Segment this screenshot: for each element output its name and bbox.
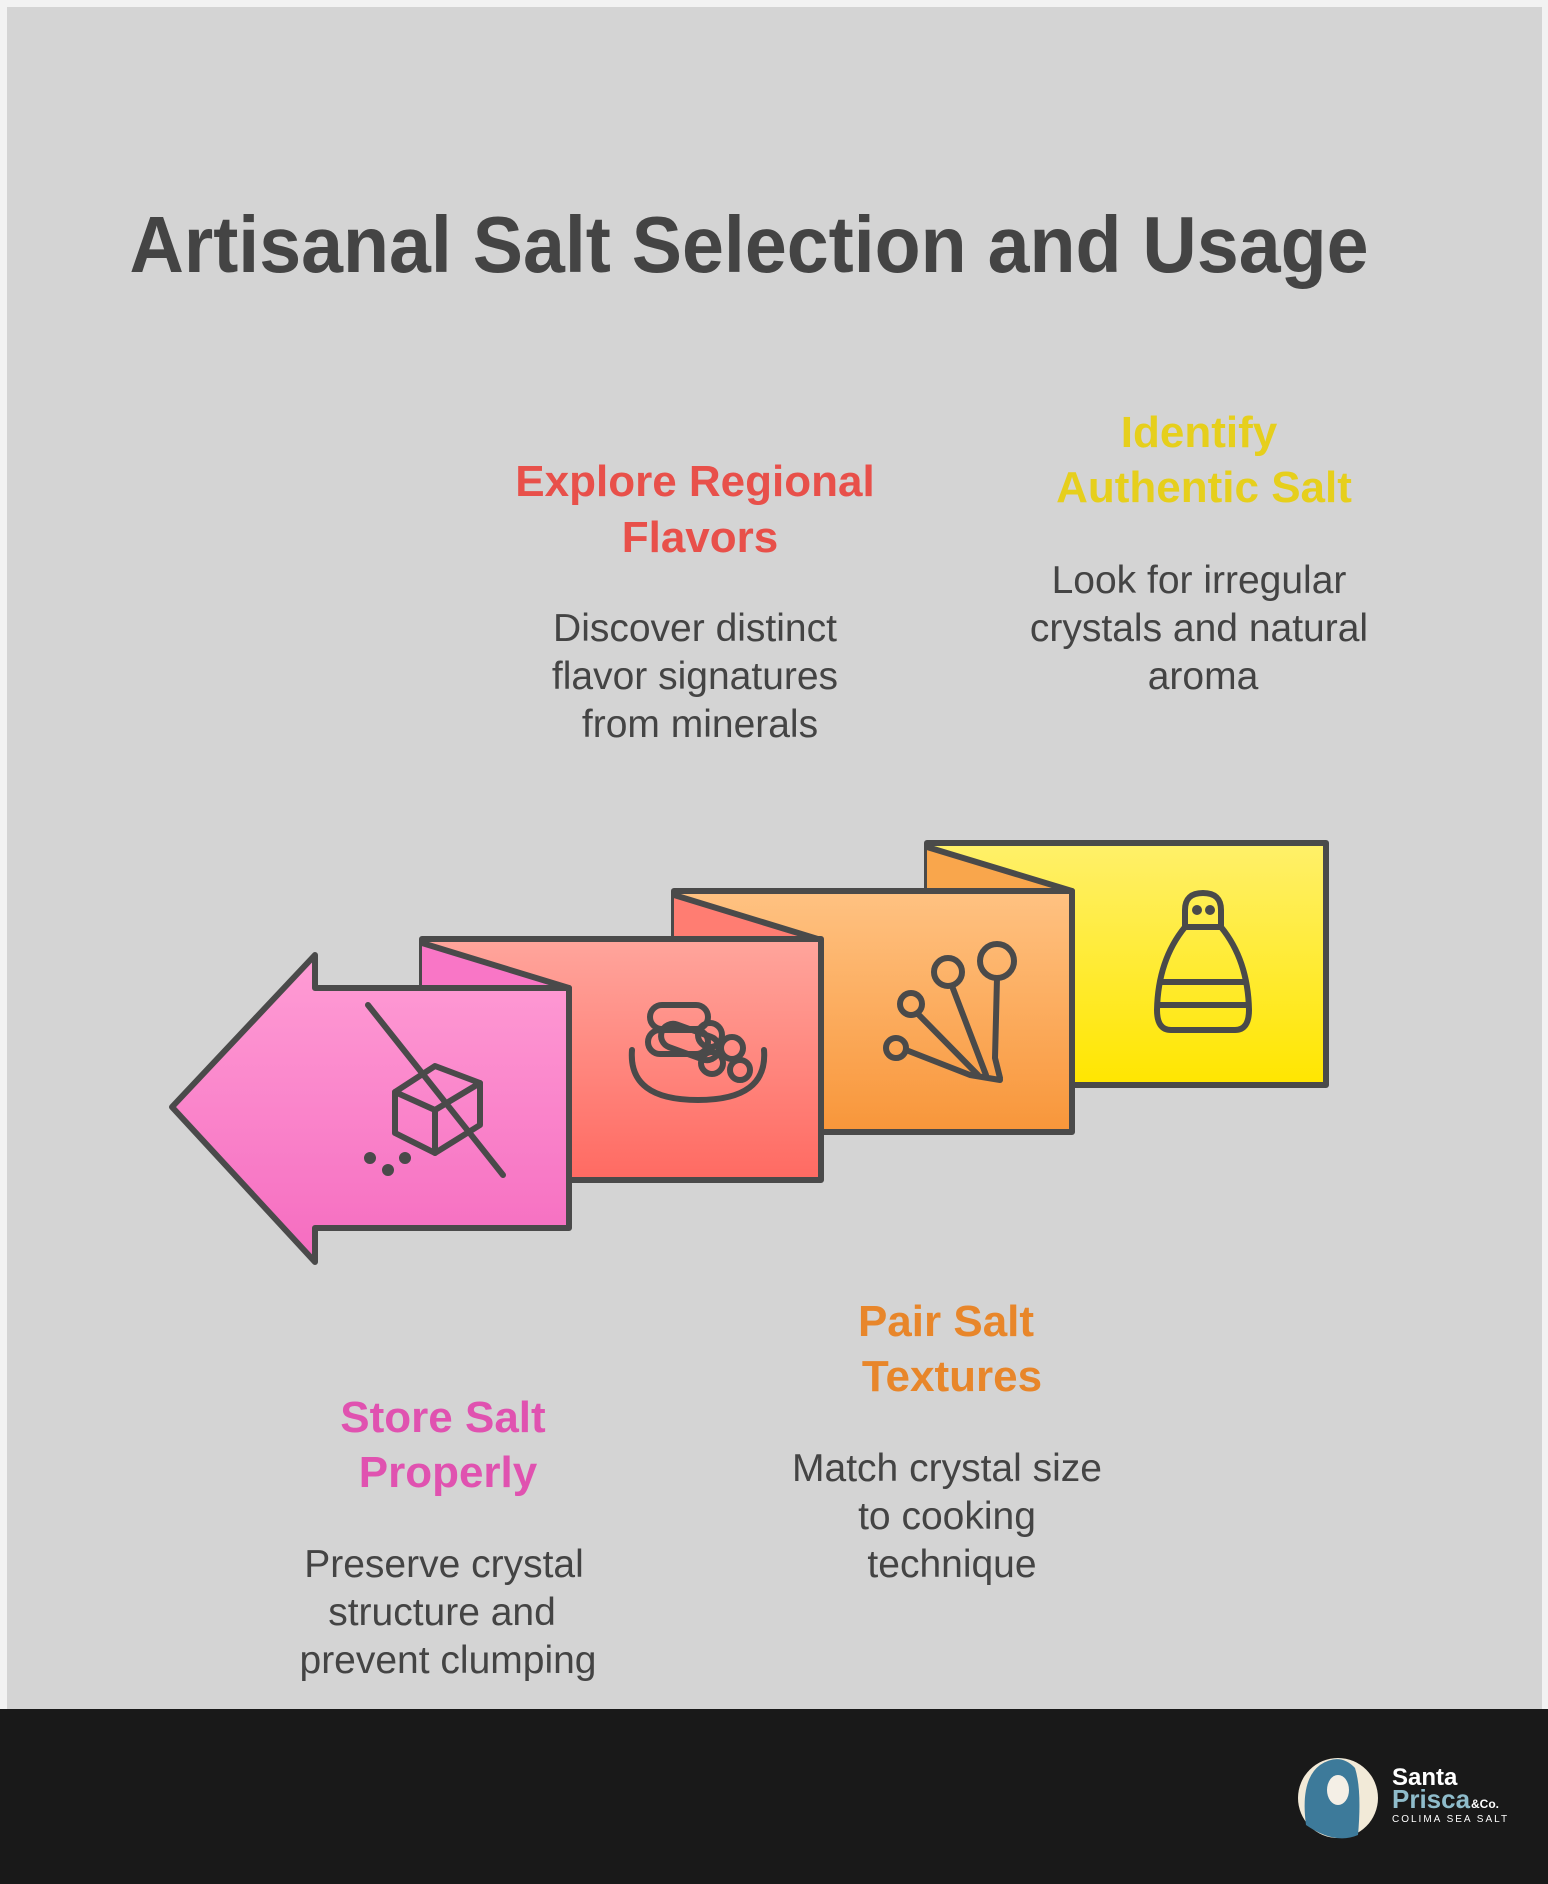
heading: identify authentic salt: Authentic Salt	[1056, 463, 1352, 512]
card: orange	[674, 891, 1072, 1132]
logo: Santa Prisca & Co.: COLIMA SEA SALT	[1392, 1814, 1509, 1825]
icon: salt logs on plate	[632, 1005, 764, 1100]
text: pair description: to cooking	[858, 1495, 1036, 1538]
heading: pair salt textures: Textures	[862, 1352, 1042, 1401]
text: identify description: aroma	[1148, 655, 1259, 698]
heading: store salt properly	[340, 1393, 546, 1497]
heading: store salt properly: Store Salt	[340, 1393, 546, 1442]
logo: Santa Prisca & Co.: Santa	[1392, 1764, 1458, 1791]
text: explore description: flavor signatures	[552, 655, 838, 698]
heading: pair salt textures: Pair Salt	[858, 1297, 1034, 1346]
heading: explore regional flavors: Explore Regional	[515, 457, 875, 506]
icon: salt shaker	[1157, 893, 1249, 1030]
heading: identify authentic salt: Identify	[1121, 408, 1278, 457]
text: pair description: Match crystal size	[792, 1447, 1102, 1490]
text: explore description: Discover distinct	[553, 607, 837, 650]
heading: identify authentic salt	[1056, 408, 1352, 512]
text: store description: prevent clumping	[300, 1639, 596, 1682]
card: yellow	[927, 843, 1326, 1085]
icon: measuring spoons	[886, 944, 1014, 1080]
logo: Santa Prisca & Co.: &Co.	[1471, 1797, 1499, 1811]
text: explore description	[552, 607, 838, 746]
title: Artisanal Salt Selection and Usage	[130, 200, 1368, 289]
arrow: pink	[172, 955, 569, 1262]
heading: pair salt textures	[858, 1297, 1042, 1401]
heading: explore regional flavors	[515, 457, 875, 562]
text: pair description	[792, 1447, 1102, 1586]
icon: no cube salt	[367, 1005, 503, 1175]
text: store description: structure and	[328, 1591, 556, 1634]
footer	[0, 1709, 1548, 1884]
logo: Santa Prisca & Co.: Prisca	[1392, 1784, 1471, 1814]
text: store description	[300, 1543, 596, 1682]
card: red	[422, 939, 821, 1180]
diagram: folded arrow steps	[172, 843, 1326, 1262]
text: store description: Preserve crystal	[304, 1543, 584, 1586]
heading: store salt properly: Properly	[359, 1448, 538, 1497]
text: explore description: from minerals	[582, 703, 818, 746]
logo: Santa Prisca & Co.	[1298, 1758, 1509, 1838]
text: identify description: Look for irregular	[1052, 559, 1346, 602]
text: pair description: technique	[867, 1543, 1037, 1586]
heading: explore regional flavors: Flavors	[622, 513, 778, 562]
text: identify description	[1030, 559, 1368, 698]
text: identify description: crystals and natural	[1030, 607, 1368, 650]
